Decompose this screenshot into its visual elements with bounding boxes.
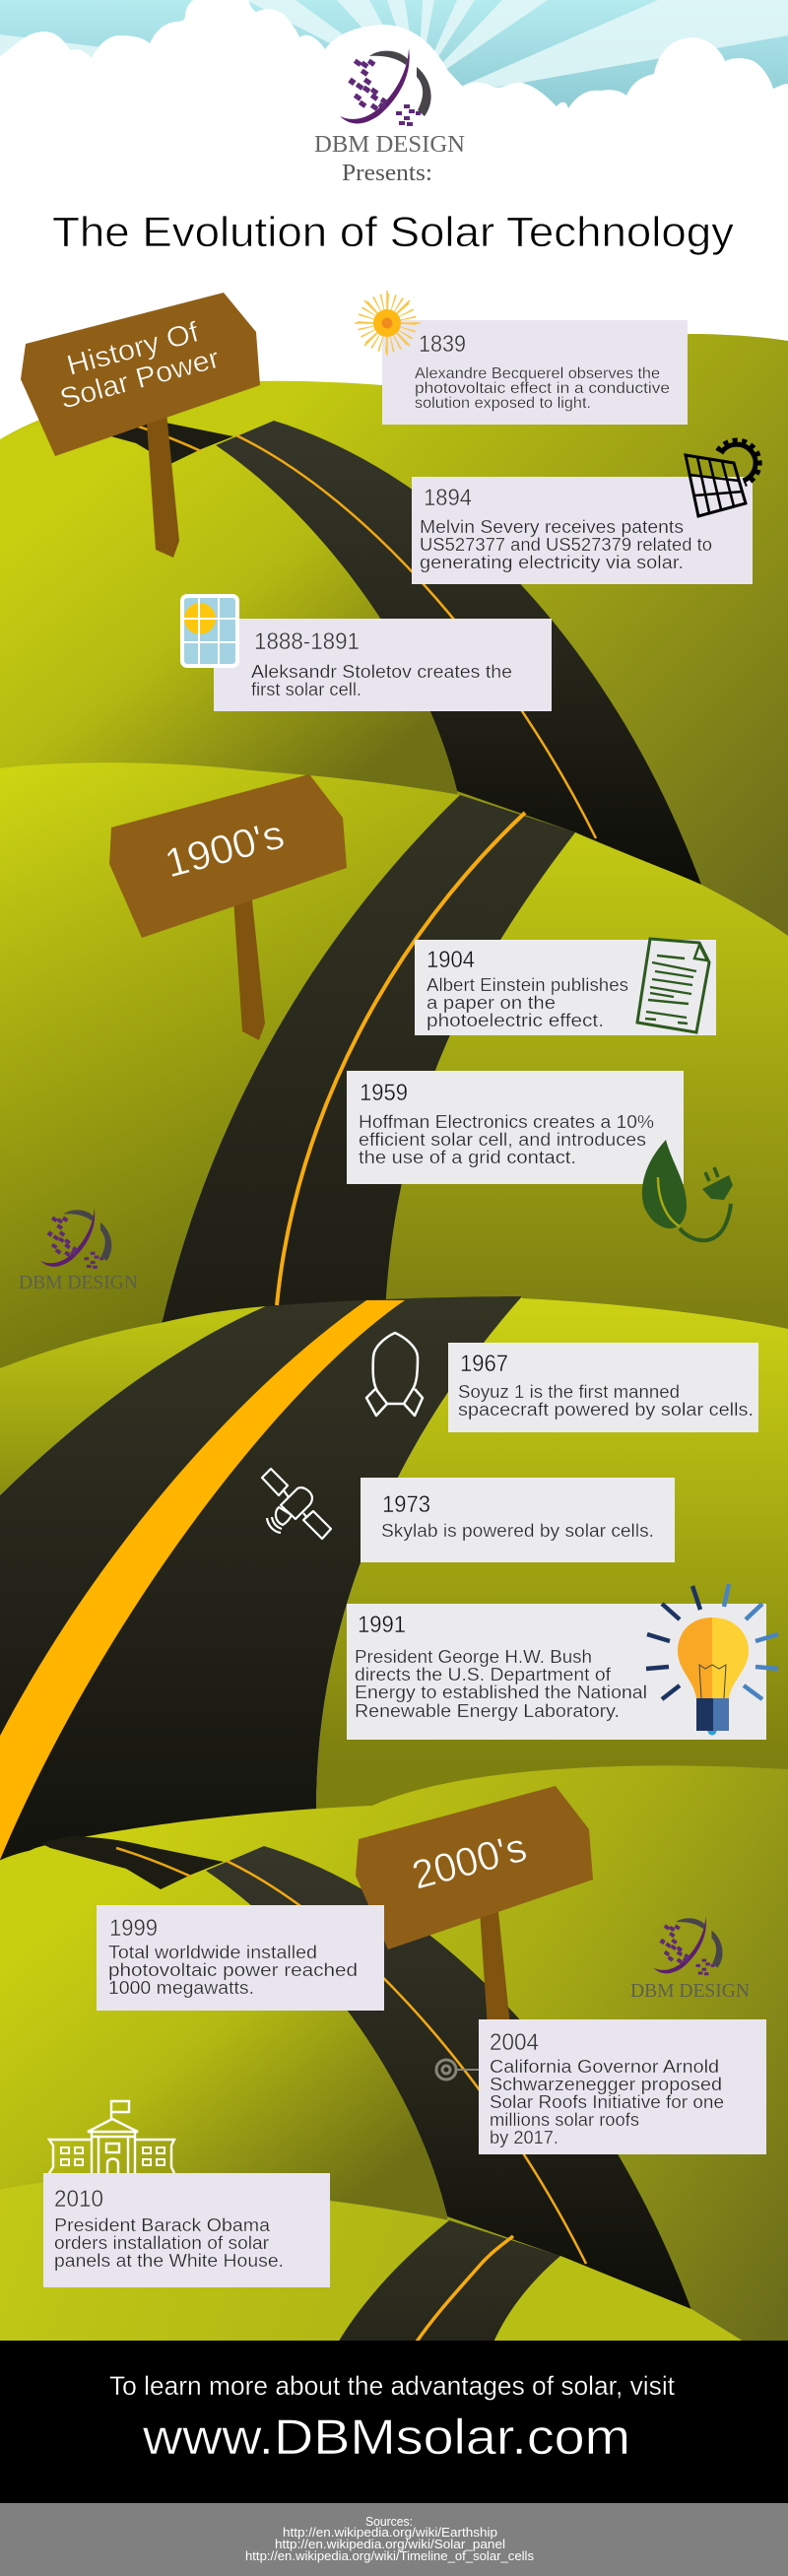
panel: 1904: 1904 (427, 947, 475, 973)
road: section 2 (158, 795, 575, 1340)
panel: 1904: Albert Einstein publishes (427, 975, 628, 995)
sign: History Of Solar Power: Solar Power (57, 343, 223, 416)
sign: History Of Solar Power (21, 293, 260, 558)
footer: sources: Sources: (365, 2514, 413, 2529)
panel: 1999: 1000 megawatts. (108, 1978, 254, 1998)
road: section 3 (0, 1296, 522, 1872)
panel: 1967: 1967 (460, 1351, 508, 1377)
hill: section 2 left (0, 762, 460, 1409)
panel: 2010: 2010 (54, 2186, 103, 2213)
panel: 1894: 1894 (424, 485, 472, 511)
panel: 1959: Hoffman Electronics creates a 10% (359, 1112, 654, 1132)
footer: sources: http://en.wikipedia.org/wiki/Solar_panel (275, 2537, 505, 2551)
sign: 1900's: 1900's (160, 811, 289, 887)
panel: 1888-1891: first solar cell. (251, 680, 361, 699)
panel: 1999 (97, 1905, 384, 2011)
panel: 2004: millions solar roofs (490, 2110, 639, 2130)
panel: 1894: generating electricity via solar. (420, 553, 684, 572)
panel: 1991: 1991 (358, 1612, 406, 1638)
road: section 1 (50, 411, 701, 885)
panel: 1888-1891 (214, 619, 552, 711)
road: section 4 foreground (337, 2220, 560, 2345)
hill: section 3 left (0, 1306, 266, 1495)
panel: 1959: the use of a grid contact. (359, 1148, 576, 1167)
footer: call to action (0, 2341, 788, 2503)
icon: white house building (49, 2101, 174, 2173)
panel: 1973 (361, 1478, 675, 1562)
road: section 4 (40, 1836, 691, 2310)
road centre line: section 2 (277, 813, 525, 1305)
panel: 2004: 2004 (490, 2029, 539, 2056)
hill: section 4 back (0, 1765, 788, 2345)
footer: sources: http://en.wikipedia.org/wiki/Timeline_of_solar_cells (245, 2548, 534, 2563)
panel: 1839: Alexandre Becquerel observes the (415, 365, 660, 382)
panel: 1904: a paper on the (427, 993, 556, 1013)
panel: 1959: 1959 (360, 1080, 408, 1106)
sign: 2000's (356, 1786, 593, 2052)
panel: 1999: photovoltaic power reached (108, 1960, 358, 1980)
panel: 2004: by 2017. (490, 2128, 558, 2147)
sign: 1900's (109, 774, 347, 1040)
footer: sources: http://en.wikipedia.org/wiki/Earthship (283, 2525, 497, 2540)
panel: 2004: Schwarzenegger proposed (490, 2075, 722, 2094)
logo: DBM Design watermark left (19, 1208, 138, 1293)
hill: section 3 right (316, 1296, 788, 1822)
panel: 1904 (415, 940, 716, 1035)
panel: 2010 (43, 2173, 330, 2287)
panel: 1991: President George H.W. Bush (355, 1647, 592, 1667)
logo: DBM Design watermark right: DBM DESIGN (630, 1980, 750, 2002)
panel: 2004: Solar Roofs Initiative for one (490, 2092, 724, 2112)
panel: 1888-1891: Aleksandr Stoletov creates the (251, 662, 512, 682)
panel: 1888-1891: 1888-1891 (254, 628, 360, 655)
panel: 1967: Soyuz 1 is the first manned (458, 1382, 680, 1402)
footer: call to action: To learn more about the advantages of solar, visit (109, 2371, 675, 2401)
panel: 1959 (347, 1071, 684, 1184)
panel: 1894: Melvin Severy receives patents (420, 517, 684, 537)
icon: light bulb (646, 1584, 778, 1736)
panel: 1973: Skylab is powered by solar cells. (381, 1521, 654, 1541)
panel: 1999: Total worldwide installed (108, 1943, 317, 1962)
logo: DBM Design watermark left: DBM DESIGN (19, 1272, 138, 1293)
footer: call to action: www.DBMsolar.com (142, 2410, 630, 2465)
panel: 1973: 1973 (382, 1491, 430, 1518)
icon: solar cell (182, 596, 237, 666)
hill: section 4 foreground right (492, 2256, 749, 2345)
panel: 1839: solution exposed to light. (415, 395, 591, 412)
panel: 2010: panels at the White House. (54, 2251, 284, 2271)
icon: sun (355, 291, 421, 356)
panel: 1991: Renewable Energy Laboratory. (355, 1701, 620, 1721)
panel: 1894: US527377 and US527379 related to (420, 535, 712, 555)
clouds (0, 0, 788, 463)
panel: 1967 (448, 1343, 758, 1432)
panel: 1904: photoelectric effect. (427, 1011, 604, 1030)
icon: rocket (366, 1333, 423, 1416)
icon: solar panel and gear (686, 440, 759, 516)
icon: paper document (637, 939, 709, 1032)
panel: 1894 (412, 477, 753, 584)
panel: 1991 (347, 1604, 766, 1740)
sky background (0, 0, 788, 118)
hill: front left section 1 (0, 423, 463, 916)
logo: DBM Design header (314, 48, 465, 158)
text: Presents: Presents: (342, 161, 432, 186)
icon: satellite (262, 1469, 331, 1539)
panel: 1991: Energy to established the National (355, 1683, 647, 1702)
hill: section 4 front left (0, 1848, 453, 2342)
hill: back hill section 1 (0, 334, 788, 985)
hill: section 2 right (374, 832, 788, 1399)
sign: History Of Solar Power: History Of (64, 316, 203, 382)
icon: leaf and plug (642, 1140, 733, 1240)
panel: 2004 (479, 2019, 766, 2154)
panel: 1839: 1839 (419, 331, 466, 358)
title: The Evolution of Solar Technology (52, 209, 735, 256)
panel: 1967: spacecraft powered by solar cells. (458, 1400, 754, 1420)
footer: sources (0, 2503, 788, 2576)
panel: 1991: directs the U.S. Department of (355, 1665, 612, 1684)
hill: section 4 foreground left (0, 2178, 449, 2345)
panel: 1959: efficient solar cell, and introduces (359, 1130, 646, 1150)
panel: 2010: orders installation of solar (54, 2233, 269, 2253)
sign: 2000's: 2000's (407, 1824, 531, 1898)
panel: 1999: 1999 (109, 1915, 158, 1942)
panel: 1839: photovoltaic effect in a conductive (415, 380, 670, 397)
logo: DBM Design watermark right (630, 1916, 750, 2002)
road centre line: section 4 foreground (415, 2236, 513, 2345)
panel: 1839 (382, 320, 688, 425)
icon: target pin (436, 2060, 479, 2080)
logo: DBM Design header: DBM DESIGN (314, 132, 465, 158)
panel: 2010: President Barack Obama (54, 2215, 271, 2235)
road centre band: section 3 (0, 1300, 405, 1860)
panel: 2004: California Governor Arnold (490, 2057, 719, 2077)
